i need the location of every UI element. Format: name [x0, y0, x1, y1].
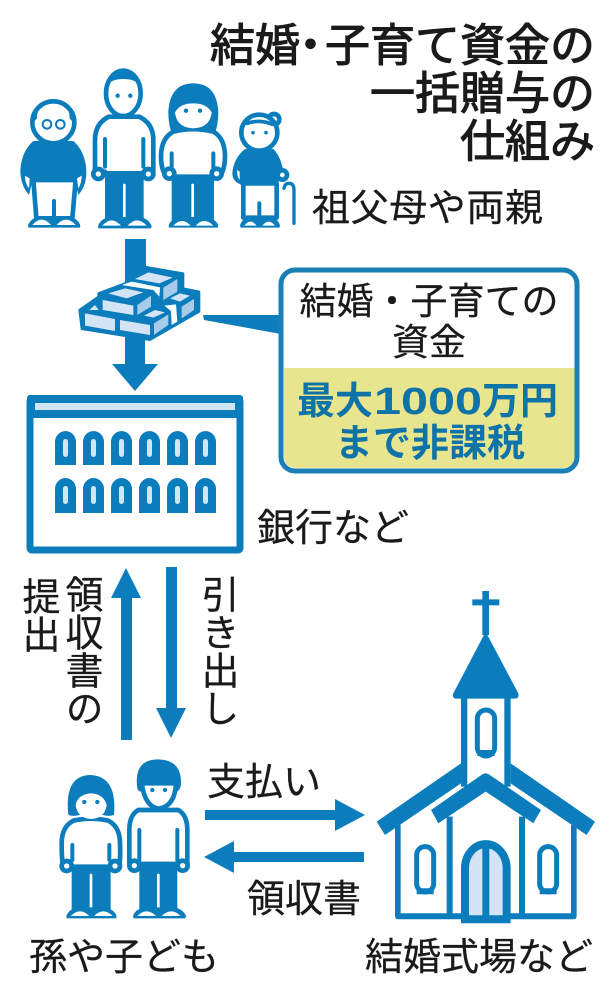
icon: bundles of money — [79, 267, 199, 340]
title: 仕組み — [460, 116, 595, 167]
title: 結婚 — [210, 20, 300, 71]
label: wedding venue: 結婚式場など — [365, 937, 593, 979]
arrow: payment right — [205, 799, 365, 831]
label: bank: 銀行など — [257, 508, 409, 550]
arrow: receipt up — [111, 568, 141, 740]
callout highlight: 万円 — [482, 381, 558, 423]
front roof — [431, 773, 541, 823]
icon: church — [377, 591, 595, 919]
callout highlight: 最大 — [297, 381, 373, 423]
arrow: withdrawal down — [156, 567, 186, 738]
walls — [395, 825, 577, 919]
icon: grandfather — [20, 101, 86, 228]
main roof — [377, 763, 595, 835]
label: children: 孫や子ども — [29, 937, 219, 979]
title: ・ — [288, 20, 333, 71]
callout text: 資金 — [392, 322, 466, 363]
cross — [472, 591, 499, 635]
vertical text: withdrawal: 引き出し — [195, 575, 237, 727]
label: payment: 支払い — [207, 762, 321, 804]
spire — [453, 632, 519, 699]
front walls — [447, 817, 525, 915]
icon: son — [129, 759, 188, 918]
vertical text: receipt submission — [16, 575, 103, 727]
side windows — [417, 847, 434, 892]
arrow: money to bank — [112, 239, 158, 391]
tower — [461, 697, 511, 787]
icon: daughter — [62, 775, 120, 918]
icon: father — [93, 71, 153, 228]
callout text: 結婚・子育ての — [300, 281, 558, 322]
label: receipt: 領収書 — [247, 879, 361, 921]
icon: mother — [161, 83, 225, 228]
icon: children — [62, 759, 188, 918]
arrow: receipt left — [204, 841, 364, 873]
title: 一括贈与の — [370, 68, 595, 119]
door — [465, 844, 507, 919]
title: 子育て資金の — [325, 20, 595, 71]
vertical text: receipt submission: 提出 — [16, 577, 59, 653]
title — [210, 20, 595, 167]
icon: grandparents and parents — [20, 71, 294, 228]
vertical text: receipt submission: 領収書の — [59, 575, 103, 727]
callout pointer — [203, 315, 281, 334]
callout text — [300, 281, 558, 363]
callout: tax-free limit — [281, 270, 577, 471]
label: grandparents and parents: 祖父母や両親 — [312, 188, 543, 230]
icon: bank — [27, 395, 243, 550]
callout highlight: まで非課税 — [335, 423, 525, 465]
callout highlight: 1000 — [374, 381, 482, 423]
icon: grandmother — [232, 114, 294, 228]
callout highlight — [297, 381, 558, 465]
